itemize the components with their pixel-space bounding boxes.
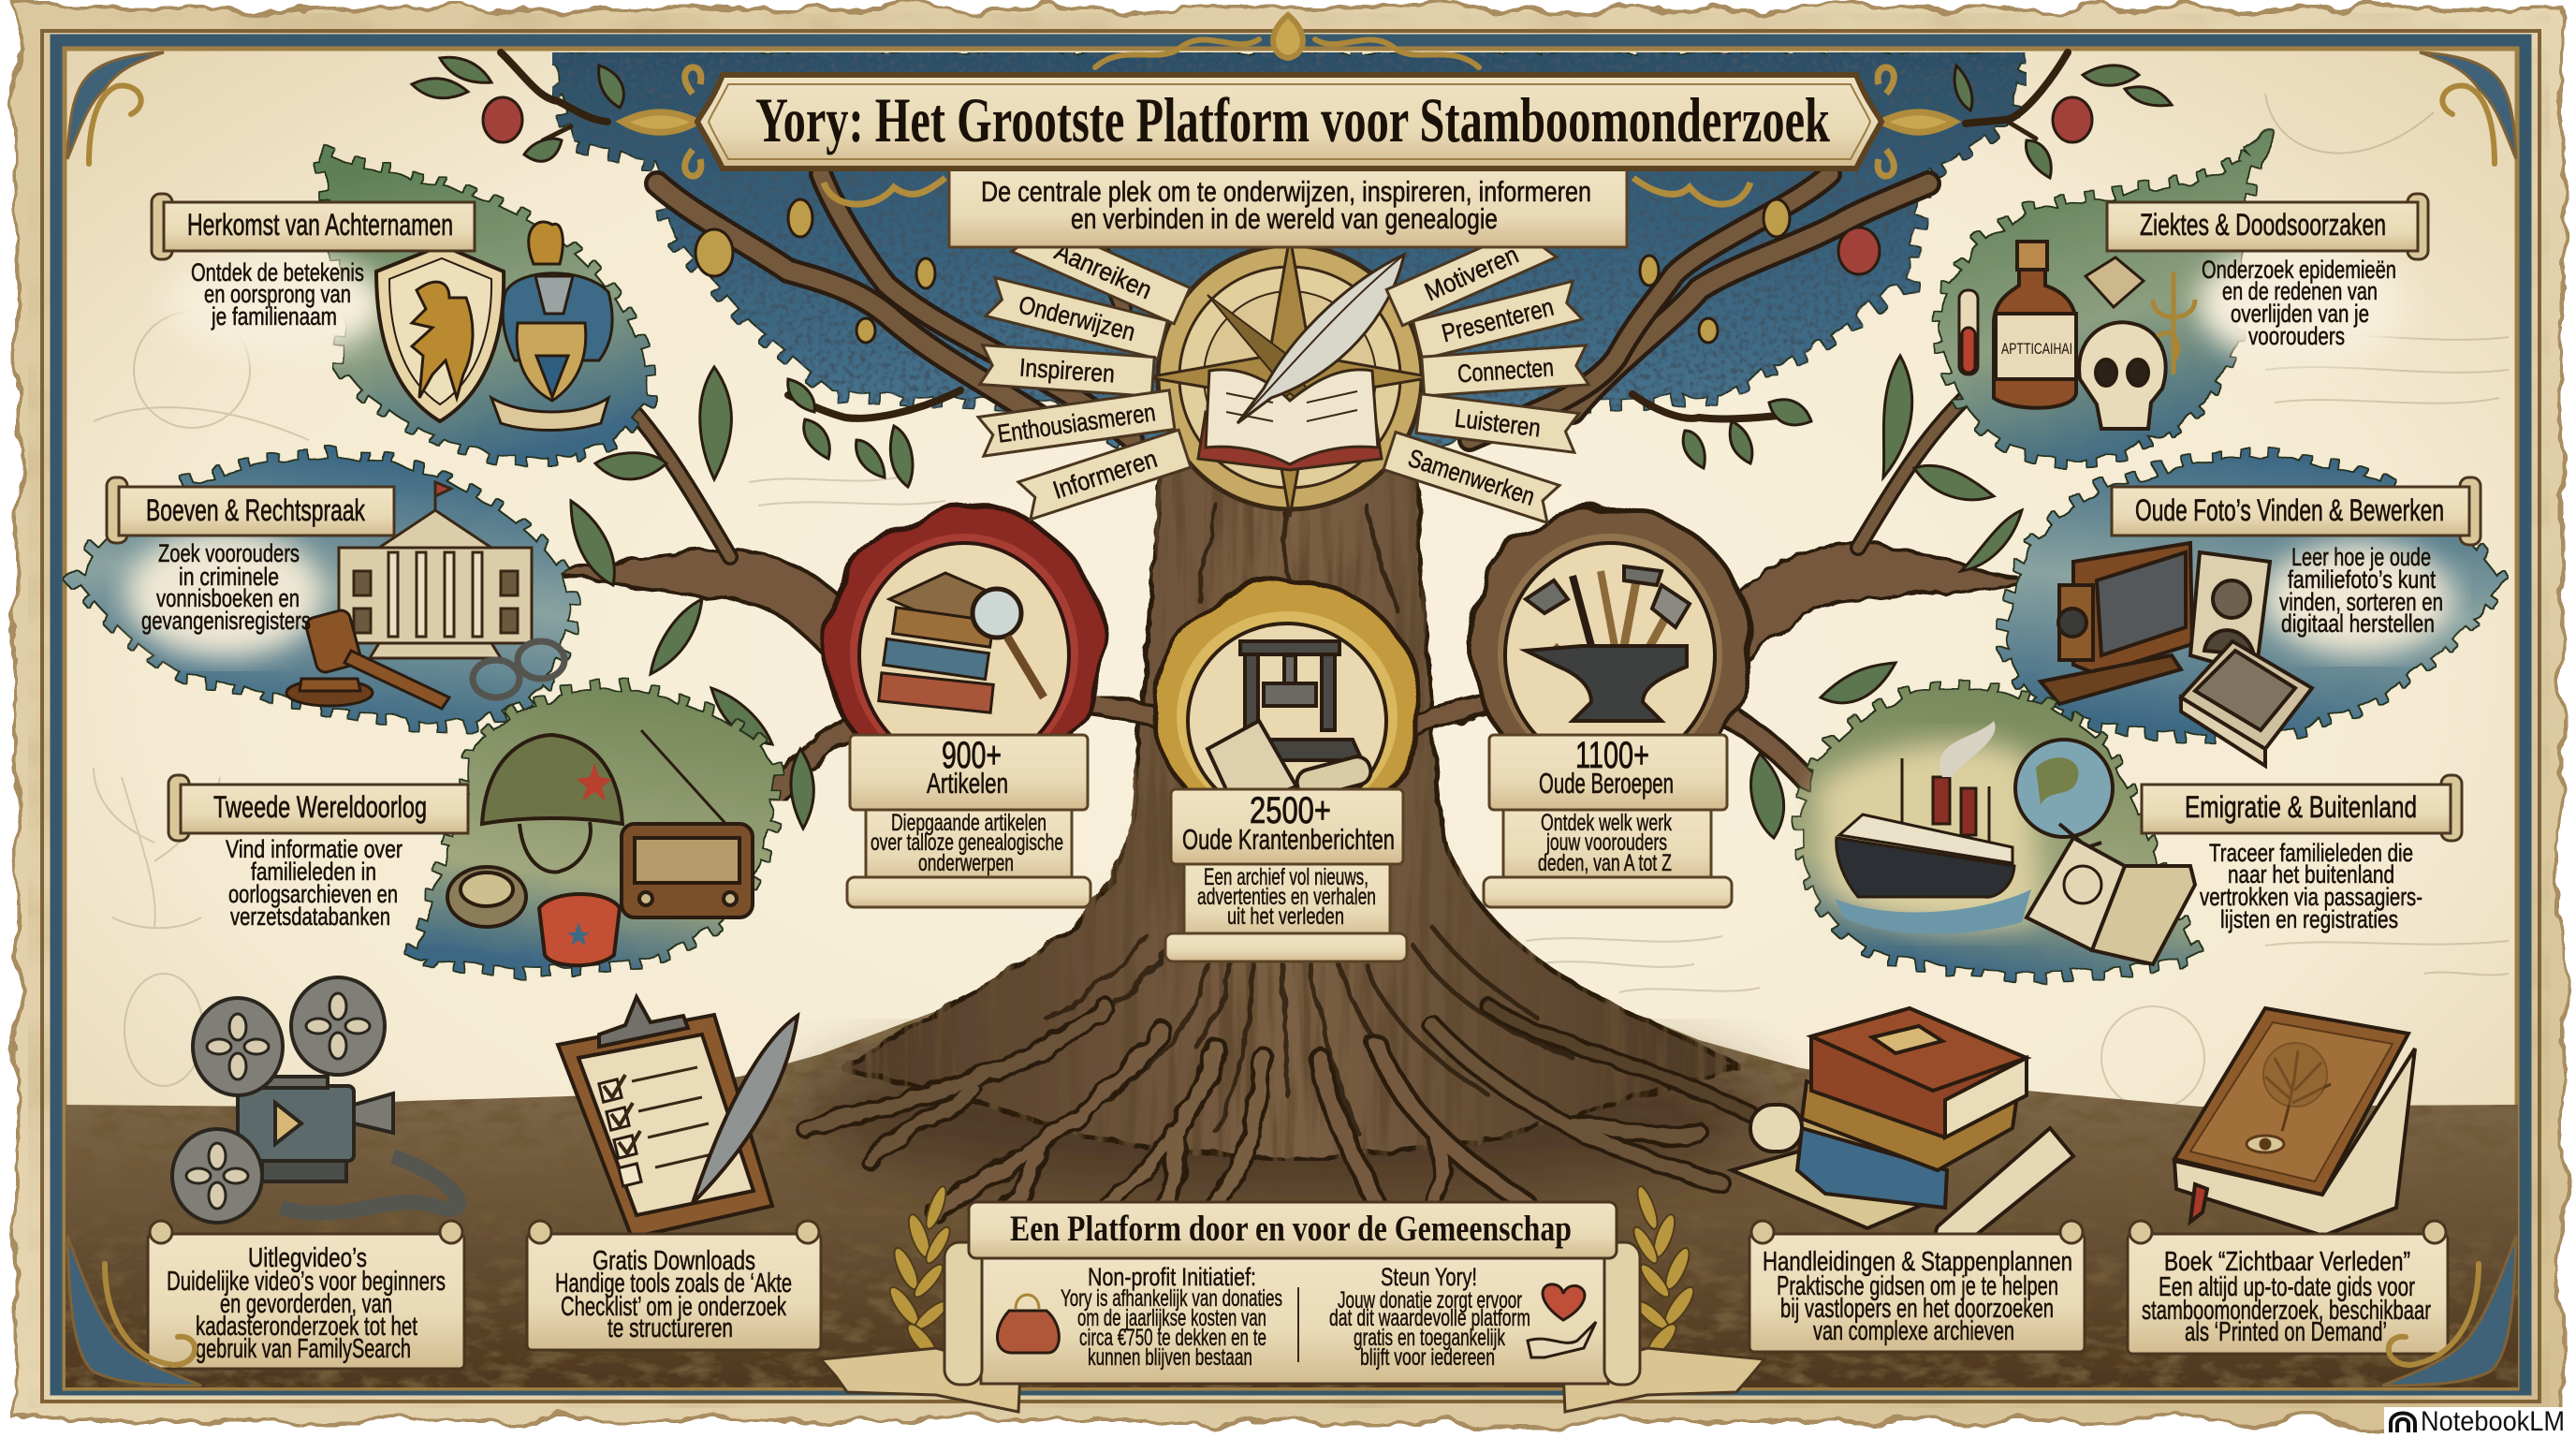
banner: Herkomst van Achternamen (152, 194, 475, 259)
icon: helmet (482, 735, 622, 873)
side rolls (944, 1242, 1640, 1385)
text: Herkomst description: je familienaam (211, 302, 337, 330)
laurels (886, 1184, 1698, 1361)
ribbon: Samenwerken: Samenwerken (1405, 444, 1538, 511)
branch: canopy (657, 183, 1039, 417)
icon: photo stack (2181, 641, 2312, 766)
icon: quill feather (1237, 255, 1404, 423)
text: Steun Yory (1329, 1263, 1530, 1371)
stat box: 900+ Artikelen: Artikelen (927, 767, 1008, 800)
card: Gratis Downloads: Checklist’ om je onderzoek (561, 1292, 786, 1322)
ribbon: Onderwijzen: Onderwijzen (1016, 290, 1138, 346)
text: Tweede Wereldoorlog description: oorlogsarchieven en (228, 880, 398, 908)
text: Non-profit Initiatief: om de jaarlijkse kosten van (1077, 1305, 1266, 1331)
ribbon: Informeren (1018, 430, 1191, 520)
text: Non-profit Initiatief: Non-profit Initiatief: (1088, 1263, 1256, 1291)
text: Tweede Wereldoorlog description: Vind informatie over (226, 835, 402, 863)
stat box: 2500+ Oude Krantenberichten: Oude Krantenberichten (1182, 823, 1395, 856)
card: Uitlegvideo's: Duidelijke video’s voor beginners (167, 1267, 446, 1297)
text: Steun Yory: gratis en toegankelijk (1354, 1325, 1505, 1351)
text: Boeven description: in criminele (179, 563, 279, 591)
banner: Herkomst van Achternamen: Herkomst van Achternamen (187, 208, 453, 242)
text: Tweede Wereldoorlog description: verzetsdatabanken (230, 902, 390, 931)
icon: heart in hand (1528, 1284, 1596, 1357)
icon: book stack and magnifier (879, 573, 1044, 712)
small twigs (788, 390, 960, 418)
text: Steun Yory: Jouw donatie zorgt ervoor (1338, 1287, 1522, 1313)
leaf panel: Boeven & Rechtspraak (78, 457, 567, 721)
icon: lion shield (376, 245, 504, 421)
ribbon: Presenteren (1413, 281, 1582, 360)
stat box: 1100+ Oude Beroepen (1484, 735, 1732, 907)
bark lines (1020, 506, 1573, 1133)
icon: open book (1198, 370, 1382, 470)
text: Oude Foto's description: familiefoto’s kunt (2288, 565, 2436, 594)
icon: printing press (1208, 641, 1374, 810)
leaf panel: Emigratie & Buitenland (1803, 691, 2195, 971)
stat box: 2500+ Oude Krantenberichten (1165, 789, 1407, 961)
ribbon: Presenteren: Presenteren (1439, 293, 1557, 347)
subtitle plaque (949, 169, 1627, 247)
card: Gratis Downloads (527, 1221, 821, 1350)
subtitle plaque: en verbinden in de wereld van genealogie (1071, 202, 1498, 235)
branch: lower left (548, 550, 842, 674)
text: Emigratie description: lijsten en registraties (2220, 905, 2398, 933)
card: Handleidingen & Stappenplannen: Handleidingen & Stappenplannen (1763, 1247, 2072, 1277)
text: Tweede Wereldoorlog description (226, 835, 402, 931)
stat box: 1100+ Oude Beroepen: deden, van A tot Z (1538, 850, 1672, 876)
card: Boek Zichtbaar Verleden: stamboomonderzoek, beschikbaar (2142, 1296, 2431, 1326)
text: Herkomst description (191, 258, 364, 330)
card: Handleidingen & Stappenplannen: bij vastlopers en het doorzoeken (1780, 1294, 2054, 1324)
stat box: 900+ Artikelen: over talloze genealogische (871, 829, 1063, 856)
text: Emigratie description: naar het buitenland (2228, 860, 2394, 888)
text: Emigratie description: vertrokken via passagiers- (2200, 883, 2422, 911)
leaf panel: Ziektes & Doodsoorzaken (1942, 156, 2408, 459)
body sheet (981, 1253, 1608, 1384)
card: Gratis Downloads: te structureren (607, 1313, 733, 1343)
text: Oude Foto's description: digitaal herstellen (2281, 609, 2435, 638)
ghost sketches on parchment (94, 94, 2509, 1109)
ribbons: left verbs (978, 215, 1191, 520)
icon: passport (2027, 838, 2195, 964)
tree canopy (552, 52, 2027, 449)
compass medallion (1148, 236, 1432, 517)
root shadow (801, 1034, 1775, 1194)
text: Ziektes description: en de redenen van (2222, 277, 2378, 305)
seal: brown, occupations (1470, 507, 1750, 785)
icon: anvil and tools (1526, 566, 1690, 721)
fruit and loose leaves (412, 57, 2172, 838)
stat box: 2500+ Oude Krantenberichten: uit het verleden (1227, 903, 1344, 930)
stat box: 900+ Artikelen (847, 735, 1090, 907)
text: Non-profit Initiatief: kunnen blijven bestaan (1088, 1344, 1252, 1371)
text: Steun Yory: blijft voor iedereen (1360, 1344, 1495, 1371)
banner: Tweede Wereldoorlog: Tweede Wereldoorlog (213, 790, 427, 824)
ribbon: Aanreiken (1012, 215, 1190, 324)
text: Boeven description (141, 539, 311, 635)
ribbon: Aanreiken: Aanreiken (1050, 237, 1156, 304)
text: Boeven description: vonnisboeken en (156, 584, 300, 612)
text: Oude Foto's description: vinden, sorteren en (2279, 588, 2443, 616)
icon: bellows camera (2041, 543, 2192, 704)
ribbons: right verbs (1383, 221, 1588, 522)
watermark: NotebookLM: NotebookLM (2421, 1406, 2565, 1437)
ribbon: Luisteren (1416, 394, 1579, 452)
banner: Ziektes & Doodsoorzaken (2107, 194, 2428, 259)
text: Non-profit Initiatief: Yory is afhankelijk van donaties (1061, 1285, 1282, 1312)
card: Gratis Downloads: Handige tools zoals de ‘Akte (555, 1269, 792, 1299)
text: Steun Yory: dat dit waardevolle platform (1329, 1305, 1530, 1331)
icon: globe (2015, 740, 2113, 847)
stat box: 2500+ Oude Krantenberichten: advertenties en verhalen (1197, 884, 1376, 910)
ornament: scrollwork beside title (622, 67, 1954, 204)
ribbon: Motiveren (1386, 221, 1557, 326)
icon: handcuffs (473, 641, 564, 697)
header (969, 1202, 1617, 1258)
icon: steamship (1835, 721, 2031, 934)
trunk (842, 440, 1741, 1161)
ground (66, 974, 2518, 1387)
icon: court building (339, 482, 532, 658)
card: Handleidingen & Stappenplannen (1749, 1221, 2085, 1352)
card: Boek Zichtbaar Verleden (2128, 1221, 2448, 1354)
stat box: 900+ Artikelen: onderwerpen (918, 850, 1014, 876)
stat box: 1100+ Oude Beroepen: Ontdek welk werk (1541, 810, 1672, 836)
icon: portrait photo (2190, 552, 2270, 674)
icon: gavel (286, 609, 449, 709)
card: Boek Zichtbaar Verleden: Een altijd up-to-date gids voor (2159, 1272, 2415, 1302)
icon: clipboard with checklist and quill (558, 997, 798, 1238)
stat box: 1100+ Oude Beroepen: jouw voorouders (1545, 829, 1667, 856)
card: Gratis Downloads: Gratis Downloads (593, 1246, 755, 1276)
text: Ziektes description (2202, 256, 2396, 350)
icon: film projector (172, 977, 459, 1223)
text: Boeven description: Zoek voorouders (158, 539, 300, 567)
text: Herkomst description: Ontdek de betekenis (191, 258, 364, 286)
ribbon: Enthousiasmeren: Enthousiasmeren (996, 398, 1157, 448)
panel: Een Platform door en voor de Gemeenschap (821, 1184, 1764, 1412)
card: Boek Zichtbaar Verleden: Boek “Zichtbaar Verleden” (2164, 1247, 2410, 1277)
leaf panel: Oude Foto's Vinden & Bewerken (2007, 459, 2499, 766)
card: Uitlegvideo's: en gevorderden, van (220, 1289, 392, 1319)
title banner (622, 67, 1954, 204)
roots (805, 1006, 1750, 1226)
icon: stacked books with map and scroll (1732, 1008, 2073, 1244)
text: Oude Foto's description (2279, 543, 2443, 638)
stat box: 1100+ Oude Beroepen: Oude Beroepen (1539, 767, 1674, 800)
ribbon: Inspireren: Inspireren (1018, 353, 1116, 389)
card: Boek Zichtbaar Verleden: als ‘Printed on Demand’ (2185, 1317, 2387, 1347)
text: Steun Yory: Steun Yory! (1381, 1263, 1477, 1291)
text: Non-profit Initiatief: circa €750 te dekken en te (1079, 1325, 1266, 1351)
ribbon: Connecten (1422, 345, 1588, 396)
icon: skull (2079, 322, 2166, 429)
text: Herkomst description: en oorsprong van (204, 280, 351, 308)
stat box: 2500+ Oude Krantenberichten: Een archief vol nieuws, (1204, 864, 1368, 890)
card: Uitlegvideo's: Uitlegvideo’s (248, 1243, 367, 1273)
banner: Oude Foto's Vinden & Bewerken: Oude Foto’s Vinden & Bewerken (2135, 493, 2444, 527)
seal: red, articles (824, 507, 1105, 785)
tree emblem (2247, 1043, 2331, 1152)
text: Ziektes description: overlijden van je (2231, 300, 2369, 328)
card: Uitlegvideo's: kadasteronderzoek tot het (196, 1312, 417, 1342)
tree trunk and branches (501, 52, 2068, 1226)
icon: purse (997, 1295, 1059, 1353)
text: Emigratie description (2200, 839, 2422, 933)
ribbon: Inspireren (980, 345, 1154, 396)
header: Een Platform door en voor de Gemeenschap (1010, 1209, 1572, 1249)
banner: Tweede Wereldoorlog (168, 775, 468, 841)
icon: Zichtbaar Verleden book (2174, 1008, 2415, 1236)
icon: apothecary bottle (1994, 242, 2076, 408)
stat box: 2500+ Oude Krantenberichten: 2500+ (1250, 790, 1331, 831)
stat box: 900+ Artikelen: Diepgaande artikelen (891, 810, 1046, 836)
seal: gold, newspapers (1153, 580, 1421, 833)
ribbon: Onderwijzen (986, 278, 1167, 359)
title banner: Yory: Het Grootste Platform voor Stamboomonderzoek (755, 84, 1830, 155)
banner: Oude Foto's Vinden & Bewerken (2112, 477, 2481, 545)
banner: Boeven & Rechtspraak (107, 477, 394, 543)
leaf panel: Herkomst van Achternamen (166, 156, 647, 457)
icon: test tube (1959, 290, 1978, 374)
stat box: 1100+ Oude Beroepen: 1100+ (1575, 735, 1649, 776)
banner: Emigratie & Buitenland (2142, 775, 2462, 841)
ribbon: Connecten: Connecten (1456, 353, 1555, 389)
banner: Emigratie & Buitenland: Emigratie & Buitenland (2185, 790, 2417, 824)
icon: coat of arms (491, 222, 612, 431)
text: Boeven description: gevangenisregisters (141, 607, 311, 635)
ribbon: Motiveren: Motiveren (1420, 241, 1523, 306)
icon: radio (622, 730, 753, 917)
ribbon: Informeren: Informeren (1049, 445, 1161, 505)
stat box: 900+ Artikelen: 900+ (942, 735, 1002, 776)
icon: bracelet and armband (447, 867, 620, 965)
text: Tweede Wereldoorlog description: familieleden in (251, 858, 376, 886)
text: Ziektes description: voorouders (2248, 322, 2345, 350)
text: Oude Foto's description: Leer hoe je oude (2291, 543, 2431, 571)
text: Emigratie description: Traceer familieleden die (2209, 839, 2413, 867)
text: Non-profit Initiatief (1061, 1263, 1282, 1371)
icon: apothecary bottle: APTTICAIHAI (2001, 340, 2072, 358)
text: Ziektes description: Onderzoek epidemieën (2202, 256, 2396, 284)
card: Uitlegvideo's (148, 1221, 464, 1369)
subtitle plaque: De centrale plek om te onderwijzen, inspireren, informeren (981, 175, 1591, 208)
card: Uitlegvideo's: gebruik van FamilySearch (196, 1334, 411, 1364)
card: Handleidingen & Stappenplannen: Praktische gidsen om je te helpen (1777, 1271, 2058, 1301)
ribbon: Luisteren: Luisteren (1454, 404, 1542, 442)
ribbon tails (821, 1348, 1764, 1412)
banner: Ziektes & Doodsoorzaken: Ziektes & Doodsoorzaken (2140, 208, 2386, 242)
icon: caduceus and cards (2153, 271, 2195, 374)
leaf panel: Tweede Wereldoorlog (412, 690, 773, 966)
banner: Boeven & Rechtspraak: Boeven & Rechtspraak (146, 493, 366, 527)
branch: lower right (1732, 541, 2031, 674)
card: Handleidingen & Stappenplannen: van complexe archieven (1813, 1316, 2014, 1346)
